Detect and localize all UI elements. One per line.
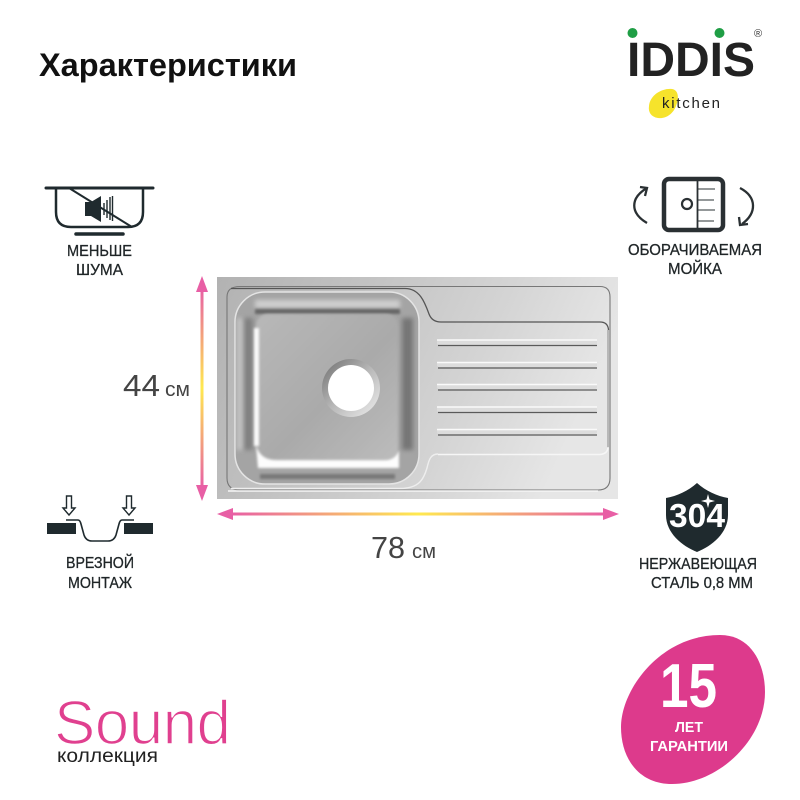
icon: undermount: [47, 496, 153, 541]
plate: [217, 277, 618, 499]
logo: iddis kitchen: [627, 28, 762, 118]
collection name: коллекция: [57, 746, 158, 767]
arrow: height: [196, 276, 208, 501]
label: less noise: [67, 243, 132, 279]
logo: iddis kitchen: kitchen: [662, 95, 720, 112]
dimension: width: 78: [371, 530, 405, 565]
bowl: [235, 292, 419, 484]
label: less noise: МЕНЬШЕ: [67, 243, 132, 260]
label: undermount: МОНТАЖ: [68, 575, 133, 592]
dimension: height: см: [165, 379, 190, 401]
dimension: height: 44: [123, 368, 160, 403]
dimension: height: [123, 368, 190, 403]
warranty badge: ГАРАНТИИ: [650, 738, 728, 755]
title: Характеристики: [39, 47, 297, 83]
icon: 304 shield: [666, 483, 728, 552]
collection name: Sound: [54, 689, 231, 758]
icon: reversible sink: [634, 179, 753, 230]
logo: iddis kitchen: IDDIS: [627, 34, 755, 87]
label: reversible sink: ОБОРАЧИВАЕМАЯ: [628, 242, 762, 259]
ribs: [437, 340, 597, 435]
label: undermount: [66, 554, 134, 592]
label: reversible sink: [628, 242, 762, 278]
label: stainless steel: НЕРЖАВЕЮЩАЯ: [639, 556, 757, 573]
warranty badge: 15: [660, 652, 717, 721]
label: stainless steel: СТАЛЬ 0,8 ММ: [651, 575, 753, 592]
label: stainless steel: [639, 556, 757, 592]
arrow: width: [217, 508, 619, 520]
rim groove: [227, 286, 610, 490]
drain hole: [322, 359, 380, 417]
icon: sparkle: [701, 494, 715, 508]
logo: iddis kitchen: ®: [754, 28, 762, 40]
label: undermount: ВРЕЗНОЙ: [66, 554, 134, 572]
dimension: width: см: [412, 541, 436, 563]
warranty badge: ЛЕТ: [675, 719, 703, 736]
icon: less noise: [46, 188, 153, 234]
text: 304: 304: [669, 497, 726, 534]
sink photo: [217, 277, 618, 499]
dimension: width: [371, 530, 436, 565]
label: reversible sink: МОЙКА: [668, 260, 723, 278]
warranty badge: [621, 635, 765, 784]
label: less noise: ШУМА: [76, 262, 124, 279]
